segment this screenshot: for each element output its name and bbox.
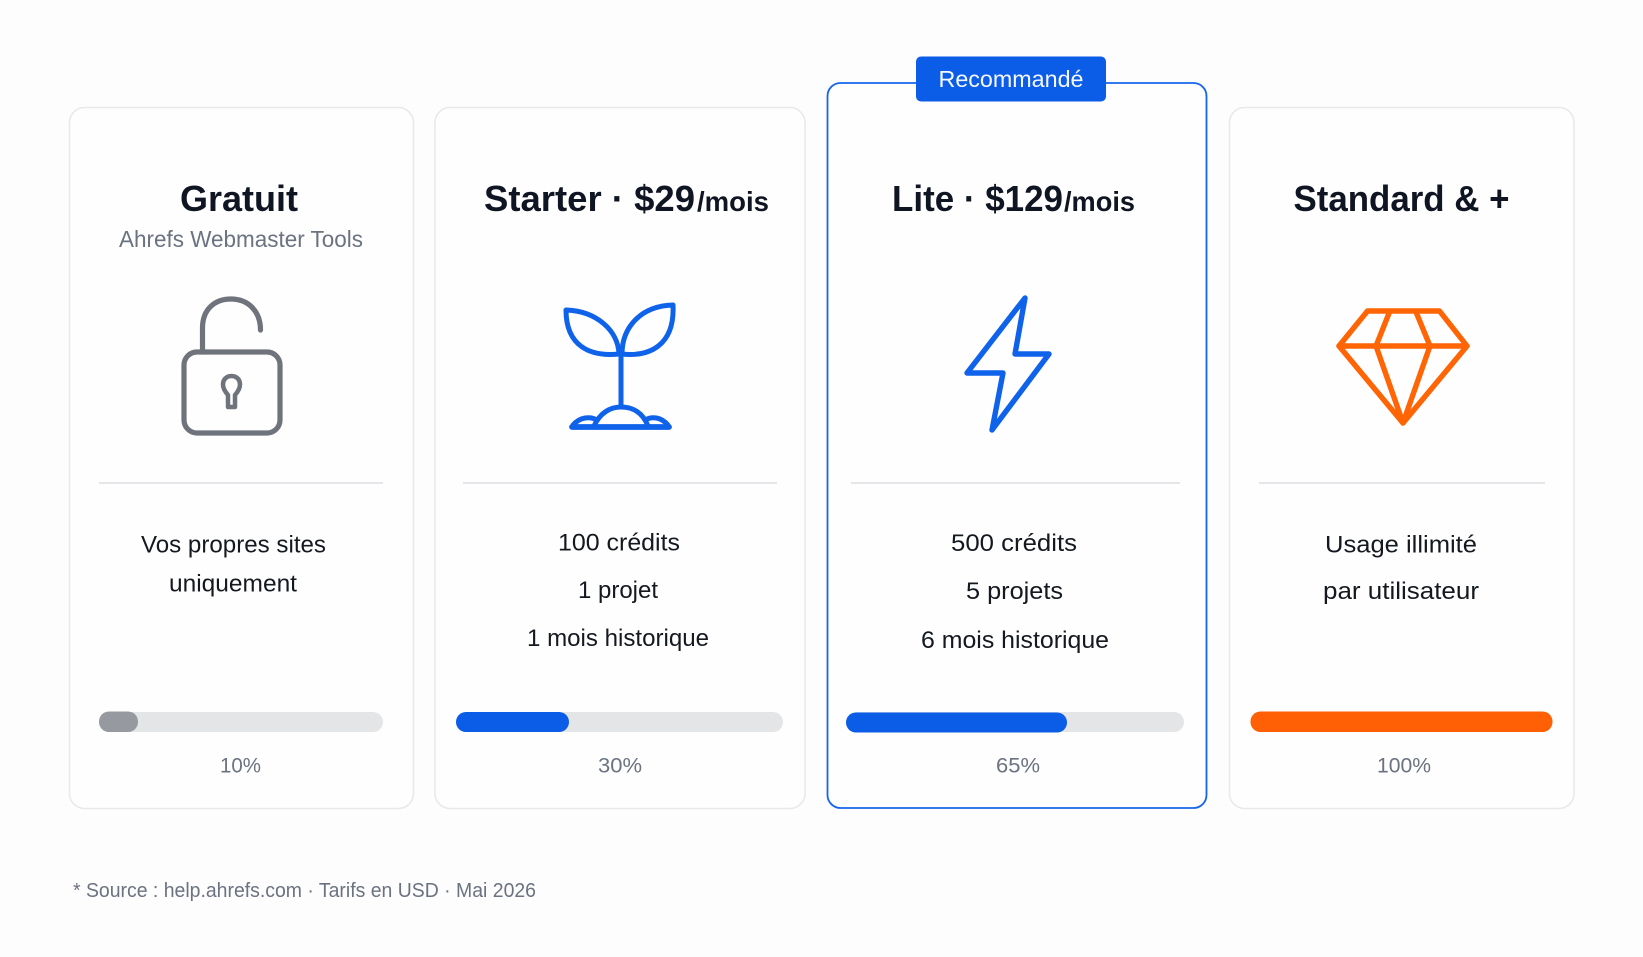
features: Starter: 1 mois historique <box>527 625 709 652</box>
heading: Lite $129/mois: /mois <box>1064 186 1135 217</box>
icon: diamond <box>1339 311 1467 423</box>
panel: Lite (recommended) <box>828 56 1206 808</box>
heading: Starter $29/mois: Starter · $29 <box>484 178 695 219</box>
features: Starter: 100 crédits <box>558 530 680 556</box>
icon: lightning bolt <box>967 298 1049 430</box>
icon: sprout <box>566 305 673 427</box>
progress bar: 10% <box>99 712 383 732</box>
progress bar: 65% <box>846 712 1184 732</box>
heading: Lite $129/mois: Lite · $129 <box>892 178 1063 219</box>
features: Standard: Usage illimité <box>1325 532 1477 558</box>
progress bar: 100% <box>1250 712 1552 732</box>
panel: Gratuit <box>70 108 414 808</box>
features: Starter: 1 projet <box>578 577 658 604</box>
heading: Gratuit: Gratuit <box>180 178 298 219</box>
features: Starter <box>527 530 709 652</box>
features: Gratuit: uniquement <box>169 570 297 598</box>
label: 65%: 65% <box>996 754 1040 778</box>
subtitle: Ahrefs Webmaster Tools: Ahrefs Webmaster Tools <box>119 226 363 252</box>
badge: Recommandé: Recommandé <box>938 66 1084 92</box>
label: 100%: 100% <box>1377 754 1431 778</box>
features: Lite: 6 mois historique <box>921 627 1109 654</box>
footnote: source: * Source : help.ahrefs.com · Tarifs en USD · Mai 2026 <box>73 880 536 902</box>
features: Standard <box>1323 532 1479 605</box>
panel: Starter <box>435 108 805 808</box>
label: 10%: 10% <box>220 754 261 778</box>
heading: Starter $29/mois: /mois <box>697 186 769 217</box>
features: Standard: par utilisateur <box>1323 578 1479 605</box>
panel: Standard <box>1230 108 1574 808</box>
progress bar: 30% <box>456 712 783 732</box>
features: Lite: 500 crédits <box>951 530 1077 557</box>
label: 30%: 30% <box>598 754 642 778</box>
features: Gratuit <box>141 532 326 598</box>
badge: Recommandé <box>916 56 1106 102</box>
features: Lite <box>921 530 1109 654</box>
features: Gratuit: Vos propres sites <box>141 532 326 558</box>
icon: open padlock <box>184 299 280 433</box>
features: Lite: 5 projets <box>966 578 1063 605</box>
heading: Standard & +: Standard & + <box>1294 178 1510 219</box>
